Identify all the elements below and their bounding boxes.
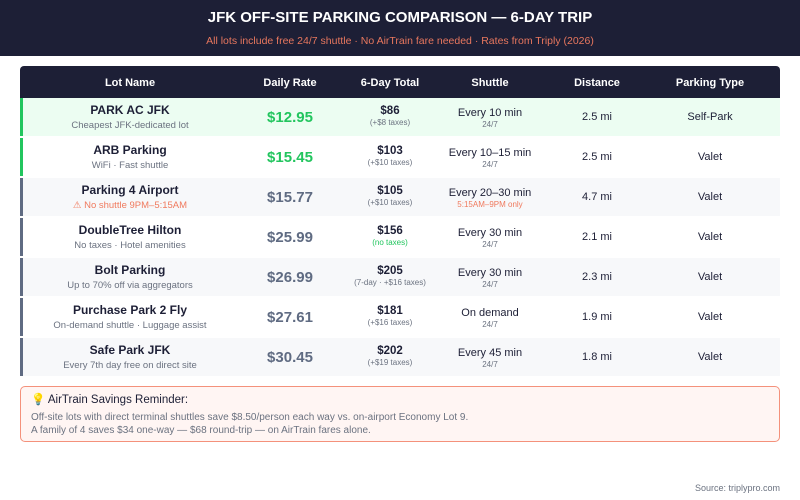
callout body: A family of 4 saves $34 one-way — $68 round-trip — on AirTrain fares alone. — [31, 425, 371, 436]
row: Parking 4 Airport: Parking 4 Airport — [82, 183, 178, 197]
row: Bolt Parking: 24/7 — [482, 280, 498, 289]
row: ARB Parking: (+$10 taxes) — [368, 158, 412, 167]
row: Safe Park JFK: Safe Park JFK — [90, 343, 170, 357]
table header: Distance — [574, 77, 620, 89]
row: Bolt Parking: 2.3 mi — [582, 271, 612, 283]
row: Bolt Parking: Every 30 min — [458, 267, 522, 279]
row: PARK AC JFK: $12.95 — [267, 109, 313, 126]
row: Parking 4 Airport: ⚠ No shuttle 9PM–5:15AM — [73, 200, 187, 211]
row: PARK AC JFK — [20, 98, 780, 136]
row: DoubleTree Hilton: $25.99 — [267, 229, 313, 246]
row: ARB Parking — [20, 138, 780, 176]
row: Bolt Parking: Up to 70% off via aggregators — [67, 280, 193, 291]
row: Purchase Park 2 Fly: $27.61 — [267, 309, 313, 326]
row: Bolt Parking — [20, 258, 780, 296]
row: Purchase Park 2 Fly: $181 — [377, 305, 403, 317]
row: ARB Parking: 24/7 — [482, 160, 498, 169]
callout body — [31, 412, 468, 436]
row: Parking 4 Airport: (+$10 taxes) — [368, 198, 412, 207]
row: PARK AC JFK: Self-Park — [687, 111, 733, 123]
table header: Shuttle — [471, 77, 509, 89]
row: Safe Park JFK: $202 — [377, 345, 403, 357]
row: ARB Parking: Valet — [698, 151, 722, 163]
header banner: All lots include free 24/7 shuttle · No AirTrain fare needed · Rates from Triply (2026) — [206, 35, 594, 47]
callout body: Off-site lots with direct terminal shuttles save $8.50/person each way vs. on-airport Economy Lot 9. — [31, 412, 468, 423]
row: Purchase Park 2 Fly: (+$16 taxes) — [368, 318, 412, 327]
row: PARK AC JFK: 24/7 — [482, 120, 498, 129]
row: DoubleTree Hilton: No taxes · Hotel amenities — [74, 240, 186, 251]
row: Safe Park JFK: 1.8 mi — [582, 351, 612, 363]
row: Parking 4 Airport: $105 — [377, 185, 403, 197]
row: Purchase Park 2 Fly: On-demand shuttle · Luggage assist — [53, 320, 207, 331]
callout: AirTrain savings — [20, 386, 780, 442]
row: Purchase Park 2 Fly: Purchase Park 2 Fly — [73, 303, 187, 317]
row: ARB Parking: Every 10–15 min — [449, 147, 531, 159]
row: Safe Park JFK: Every 7th day free on direct site — [63, 360, 197, 371]
header banner: JFK OFF-SITE PARKING COMPARISON — 6-DAY TRIP — [208, 9, 592, 26]
row: Safe Park JFK — [20, 338, 780, 376]
row: Purchase Park 2 Fly: Valet — [698, 311, 722, 323]
row: DoubleTree Hilton: 2.1 mi — [582, 231, 612, 243]
row: Safe Park JFK: 24/7 — [482, 360, 498, 369]
row: Purchase Park 2 Fly: 1.9 mi — [582, 311, 612, 323]
row: Safe Park JFK: Every 45 min — [458, 347, 522, 359]
row: ARB Parking: $103 — [377, 145, 403, 157]
row: PARK AC JFK: Every 10 min — [458, 107, 522, 119]
row: Bolt Parking: (7-day · +$16 taxes) — [354, 278, 426, 287]
row: Parking 4 Airport: 4.7 mi — [582, 191, 612, 203]
row: Purchase Park 2 Fly: On demand — [461, 307, 519, 319]
table header: Daily Rate — [263, 77, 317, 89]
row: Safe Park JFK: Valet — [698, 351, 722, 363]
table header: 6-Day Total — [361, 77, 419, 89]
row: Parking 4 Airport: $15.77 — [267, 189, 313, 206]
row: PARK AC JFK: $86 — [380, 105, 400, 117]
row: ARB Parking: 2.5 mi — [582, 151, 612, 163]
header banner — [0, 0, 800, 56]
row: Purchase Park 2 Fly: 24/7 — [482, 320, 498, 329]
row: Bolt Parking: Bolt Parking — [95, 263, 165, 277]
source note: Source: triplypro.com — [695, 483, 780, 493]
row: Bolt Parking: Valet — [698, 271, 722, 283]
row: ARB Parking: ARB Parking — [93, 143, 167, 157]
table header — [20, 66, 780, 98]
row: Parking 4 Airport: Every 20–30 min — [449, 187, 531, 199]
row: DoubleTree Hilton: 24/7 — [482, 240, 498, 249]
row: DoubleTree Hilton: $156 — [377, 225, 403, 237]
row: Purchase Park 2 Fly — [20, 298, 780, 336]
row: DoubleTree Hilton: Valet — [698, 231, 722, 243]
row: PARK AC JFK: Cheapest JFK-dedicated lot — [71, 120, 189, 131]
row: Bolt Parking: $205 — [377, 265, 403, 277]
row: Bolt Parking: $26.99 — [267, 269, 313, 286]
row: DoubleTree Hilton: Every 30 min — [458, 227, 522, 239]
row: DoubleTree Hilton: (no taxes) — [372, 238, 408, 247]
row: ARB Parking: $15.45 — [267, 149, 313, 166]
row: DoubleTree Hilton: DoubleTree Hilton — [79, 223, 181, 237]
row: Safe Park JFK: $30.45 — [267, 349, 313, 366]
row: Parking 4 Airport: Valet — [698, 191, 722, 203]
callout heading: 💡 AirTrain Savings Reminder: — [31, 394, 188, 406]
row: Safe Park JFK: (+$19 taxes) — [368, 358, 412, 367]
row: Parking 4 Airport — [20, 178, 780, 216]
table header: Lot Name — [105, 77, 155, 89]
row: PARK AC JFK: (+$8 taxes) — [370, 118, 410, 127]
row: ARB Parking: WiFi · Fast shuttle — [92, 160, 168, 171]
row: Parking 4 Airport: 5:15AM–9PM only — [457, 200, 523, 209]
row: PARK AC JFK: PARK AC JFK — [90, 103, 170, 117]
row: PARK AC JFK: 2.5 mi — [582, 111, 612, 123]
table header: Parking Type — [676, 77, 744, 89]
row: DoubleTree Hilton — [20, 218, 780, 256]
